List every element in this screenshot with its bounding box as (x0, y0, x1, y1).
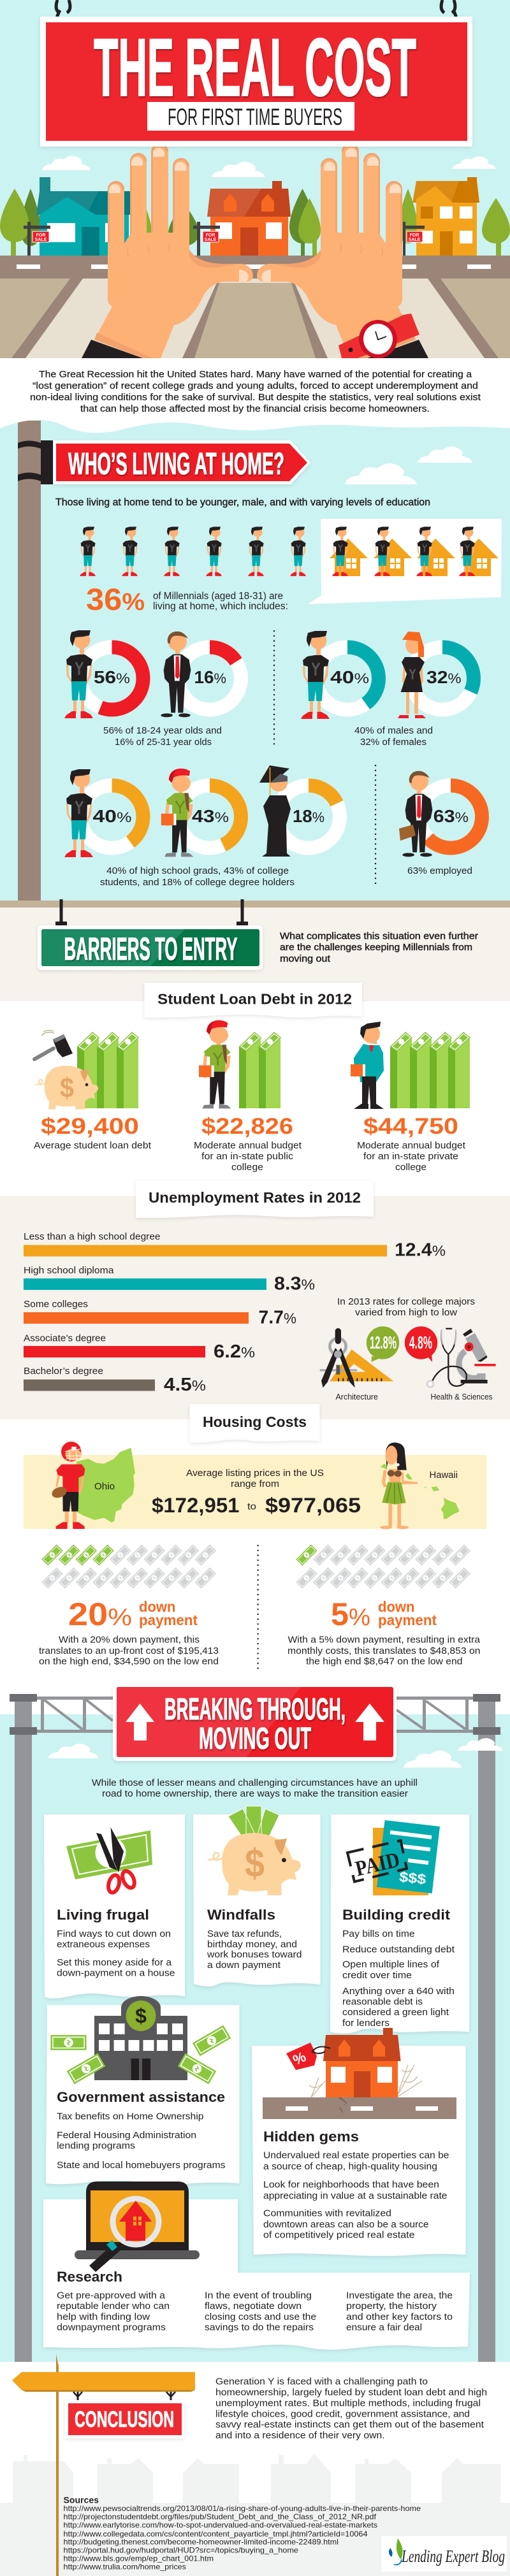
bar: less than high school (24, 1232, 446, 1261)
sources: Sources (64, 2494, 99, 2505)
sources: http://www.pewsocialtrends.org/2013/08/01/a-rising-share-of-young-adults-live-in-their-parents-home (64, 2504, 421, 2513)
captions: age: 56% of 18-24 year olds and (103, 726, 222, 736)
conclusion signpost (12, 2354, 195, 2576)
major labels: Health & Sciences (431, 1393, 492, 1401)
divider (375, 765, 376, 885)
watch (339, 314, 419, 358)
major labels (335, 1393, 492, 1401)
icon: health and sciences (427, 1328, 496, 1387)
panel: hidden gems: Hidden gems (263, 2129, 359, 2145)
piggy bank (35, 1066, 98, 1110)
conclusion text: unemployment rates. But multiple methods, including frugal (215, 2399, 481, 2409)
research column 3: ensure a fair deal (346, 2322, 422, 2333)
for sale signs: SALE (35, 238, 47, 242)
sources: http://www.earlytorise.com/how-to-spot-undervalued-and-overvalued-real-estate-markets (64, 2521, 377, 2529)
panel: building credit (330, 1814, 469, 2034)
for sale signs: SALE (205, 238, 217, 242)
panel: building credit: Open multiple lines of (342, 1960, 440, 1970)
stat: public college: for an in-state public (201, 1152, 293, 1162)
clouds (345, 447, 472, 484)
bar: some colleges (24, 1299, 296, 1328)
intro text: that can help those affected most by the financial crisis become homeowners. (80, 404, 430, 414)
house: yellow (412, 177, 479, 256)
captions: gender: 40% of males and (354, 726, 433, 736)
panel: living frugal: Set this money aside for a (57, 1958, 172, 1968)
donut: 40% males (301, 631, 379, 719)
panel: building credit: reasonable debt is (342, 1997, 423, 2008)
research column 3: property, the history (346, 2301, 437, 2312)
conclusion text: homeownership, largely fueled by student loan debt and high (215, 2387, 487, 2398)
stat: private college: for an in-state private (363, 1152, 458, 1162)
bar: some colleges: 7.7% (259, 1308, 296, 1328)
research column 3 (346, 2290, 453, 2333)
sources: https://portal.hud.gov/hudportal/HUD?src=/topics/buying_a_home (64, 2545, 298, 2554)
panel: windfalls: birthday money, and (207, 1940, 297, 1950)
bar: high school: 8.3% (274, 1273, 315, 1294)
panel: living frugal: Find ways to cut down on (57, 1929, 171, 1939)
card heading: housing costs (190, 1404, 320, 1443)
divider (273, 630, 275, 745)
clouds: top scene (42, 156, 496, 177)
research column 2: flaws, negotiate down (205, 2301, 302, 2312)
hands framing (82, 143, 428, 358)
panel: hidden gems: a source of cheap, high-quality housing (263, 2162, 437, 2172)
sources: http://www.collegedata.com/cs/content/content_payarticle_tmpl.jhtml?articleId=10064 (64, 2529, 368, 2538)
panel: hidden gems: Undervalued real estate properties can be (263, 2150, 449, 2160)
title sign (40, 0, 472, 147)
research column 3: and other key factors to (346, 2312, 453, 2322)
heading sign: barriers to entry (38, 899, 263, 970)
gantry structure (10, 1694, 500, 2362)
heading sign: who's living at home (18, 440, 310, 484)
donut: 40% high school (64, 769, 143, 857)
stat: 36% (86, 583, 288, 617)
bill grid: 20% (41, 1544, 216, 1589)
stat: public college (194, 1020, 302, 1173)
bar: less than high school: 12.4% (395, 1240, 446, 1261)
barriers text: are the challenges keeping Millennials from (280, 943, 472, 953)
donut: 16%: 16% (194, 667, 226, 687)
subtitle (147, 102, 354, 131)
price text: Average listing prices in the US (186, 1468, 324, 1479)
stat: average debt: $29,400 (41, 1114, 139, 1139)
heading sign: conclusion (65, 2400, 184, 2438)
majors text (337, 1297, 475, 1318)
panel: living frugal: extraneous expenses (57, 1940, 150, 1950)
for sale signs (24, 222, 425, 256)
heading sign: barriers to entry: BARRIERS TO ENTRY (64, 931, 237, 967)
bubble: 4.8% (405, 1326, 437, 1362)
sources: http://projectonstudentdebt.org/files/pub/Student_Debt_and_the_Class_of_2012_NR.pdf (64, 2512, 377, 2521)
card heading: student loan debt: Student Loan Debt in 2012 (157, 990, 352, 1007)
card heading: unemployment (136, 1181, 374, 1218)
ohio map and football player (50, 1442, 135, 1529)
panel: living frugal: down-payment on a house (57, 1968, 175, 1978)
caption: employed: 63% employed (407, 866, 472, 876)
icon: architecture (320, 1328, 393, 1387)
bar: bachelor (24, 1366, 206, 1395)
divider (258, 1545, 259, 1670)
for sale signs: FOR (206, 233, 215, 238)
donut: 18% graduates (259, 765, 340, 857)
majors text: In 2013 rates for college majors (337, 1297, 475, 1307)
hammer (34, 1031, 73, 1059)
conclusion text: Generation Y is faced with a challenging path to (215, 2377, 428, 2387)
intro paper (0, 358, 510, 433)
barriers text (280, 932, 478, 964)
donut: 16% (161, 632, 241, 717)
panel: windfalls: a down payment (207, 1960, 280, 1971)
donut: 56% (64, 630, 143, 718)
bill grid: 5% (296, 1544, 470, 1589)
bar chart (24, 1232, 446, 1395)
money stack (77, 1032, 139, 1108)
stat: 20% down payment (39, 1596, 219, 1667)
price text: $172,951 (152, 1494, 240, 1517)
panel: living frugal: Living frugal (57, 1907, 149, 1923)
panel: research: Research (57, 2269, 122, 2285)
stat: 5% down payment: down (378, 1598, 414, 1615)
panel: hidden gems: Look for neighborhoods that have been (263, 2180, 439, 2190)
stat: 5% down payment: payment (378, 1612, 437, 1628)
stat: 20% down payment: on the high end, $34,590 on the low end (39, 1657, 219, 1667)
figure: teal jacket (351, 1022, 384, 1109)
bar: high school (24, 1266, 315, 1294)
stat: 36%: 36% (86, 583, 145, 617)
heading sign: conclusion: CONCLUSION (75, 2407, 174, 2432)
donut: 63% employed (399, 771, 482, 857)
icon: cut bill (66, 1827, 152, 1894)
intro text: “lost generation” of recent college grads and young adults, forced to accept underemployment and (33, 381, 478, 391)
icon: run-down house (263, 2028, 456, 2119)
panel: building credit: Building credit (342, 1907, 451, 1923)
conclusion text: savvy real-estate instincts can get them out of the basement (215, 2420, 484, 2430)
bubble: 12.8% (367, 1326, 399, 1362)
captions: gender (354, 726, 433, 748)
bar: associate: Associate’s degree (24, 1333, 106, 1343)
donut: 32% females (398, 632, 474, 718)
research column 2: In the event of troubling (205, 2290, 312, 2301)
stat: 5% down payment (288, 1596, 481, 1667)
research column 1: Get pre-approved with a (57, 2290, 166, 2301)
stat: 20% down payment: down (139, 1598, 176, 1615)
panel: government assistance: Federal Housing Administration (57, 2131, 196, 2141)
panel: building credit: credit over time (342, 1971, 412, 1981)
icon: paid bill: PAID (353, 1848, 402, 1881)
panel: hidden gems (252, 2028, 466, 2256)
panel: hidden gems: appreciating in value at a sustainable rate (263, 2191, 448, 2201)
speech bubble (308, 519, 502, 604)
intro text: road to home ownership, there are ways to make the transition easier (102, 1789, 408, 1799)
card heading: unemployment: Unemployment Rates in 2012 (149, 1189, 361, 1206)
stat: public college: college (231, 1162, 263, 1173)
captions: education: students, and 18% of college degree holders (100, 878, 295, 888)
stat: public college: Moderate annual budget (194, 1141, 302, 1151)
sign panel (40, 17, 472, 147)
donut: 63% employed: 63% (433, 806, 469, 826)
price tag: % (290, 2048, 309, 2068)
stat: private college: Moderate annual budget (357, 1141, 465, 1151)
bar: less than high school: Less than a high school degree (24, 1232, 161, 1242)
people row: ten millennials (80, 527, 475, 576)
stat: 20% down payment: 20% (68, 1596, 132, 1632)
research column 2 (205, 2290, 316, 2333)
stat: 5% down payment: monthly costs, this translates to $48,853 on (288, 1646, 481, 1656)
research column 2: closing costs and use the (205, 2312, 316, 2322)
trees (0, 189, 510, 256)
panel: windfalls: work bonuses toward (207, 1950, 302, 1960)
price band: Hawaii (430, 1470, 458, 1480)
captions: education: 40% of high school grads, 43% of college (106, 866, 289, 876)
stat: 36%: of Millennials (aged 18-31) are (153, 591, 283, 602)
stat: 20% down payment: payment (139, 1612, 198, 1628)
heading sign: breaking through (113, 1684, 397, 1761)
conclusion text: lifestyle choices, good credit, government assistance, and (215, 2409, 470, 2419)
donut: 32% females: 32% (426, 667, 462, 687)
panel: building credit: for lenders (342, 2018, 390, 2029)
intro text (30, 370, 481, 414)
heading sign: who's living at home: WHO’S LIVING AT HOME? (68, 447, 284, 481)
hawaii and hula dancer (380, 1442, 460, 1529)
panel: government assistance: lending programs (57, 2141, 135, 2152)
skyline (0, 2454, 510, 2576)
small houses (330, 539, 499, 576)
panel: building credit: Anything over a 640 with (342, 1986, 455, 1997)
panel: windfalls: Save tax refunds, (207, 1929, 282, 1939)
heading sign: breaking through: MOVING OUT (199, 1722, 311, 1756)
house: orange (207, 181, 291, 256)
barriers text: What complicates this situation even further (280, 932, 478, 942)
for sale signs: FOR (36, 233, 45, 238)
stat: 5% down payment: 5% (331, 1596, 370, 1632)
road and lawn (0, 256, 510, 358)
research column 2: savings to do the repairs (205, 2322, 314, 2333)
price text: to (247, 1501, 256, 1512)
panel: hidden gems: downtown areas can also be a source (263, 2220, 428, 2230)
stat: 20% down payment: With a 20% down payment, this (59, 1635, 200, 1646)
intro text: While those of lesser means and challenging circumstances have an uphill (92, 1778, 418, 1788)
heading sign: breaking through: BREAKING THROUGH, (164, 1693, 346, 1726)
panel: research (43, 2182, 470, 2350)
bubble: 12.8%: 12.8% (370, 1333, 397, 1352)
research column 1: help with finding low (57, 2312, 150, 2322)
sources: http://budgeting.thenest.com/become-homeowner-limited-income-22489.html (64, 2538, 339, 2547)
graduate figure (259, 765, 291, 857)
pole: who's living (18, 421, 41, 901)
bar: high school: High school diploma (24, 1266, 115, 1276)
panel: building credit: Reduce outstanding debt (342, 1945, 455, 1955)
stat: public college: $22,826 (201, 1114, 293, 1139)
captions: age: 16% of 25-31 year olds (115, 737, 212, 748)
price text: range from (231, 1479, 279, 1489)
stat: average debt: Average student loan debt (34, 1141, 151, 1151)
panel: building credit: considered a green light (342, 2008, 449, 2018)
captions: education (100, 866, 295, 888)
stat: 36%: living at home, which includes: (153, 601, 288, 612)
arrow right (355, 1704, 384, 1740)
bar: bachelor: 4.5% (164, 1375, 206, 1395)
house: teal (36, 177, 130, 256)
sources: http://www.trulia.com/home_prices (64, 2562, 186, 2571)
bubble: 4.8%: 4.8% (409, 1333, 432, 1352)
donut: 40% high school: 40 % (93, 806, 131, 826)
price tag (286, 2043, 330, 2070)
price text: $977,065 (265, 1494, 361, 1517)
icon: bank with bills (50, 1996, 231, 2084)
intro text: The Great Recession hit the United States hard. Many have warned of the potential for creating a (39, 370, 472, 380)
subheading: Those living at home tend to be younger, male, and with varying levels of education (55, 497, 430, 508)
panel: windfalls (193, 1806, 320, 1986)
stat: 5% down payment: With a 5% down payment, resulting in extra (288, 1635, 481, 1646)
arrow left (126, 1704, 154, 1740)
card heading: student loan debt (144, 983, 362, 1018)
piggy bank: $ (60, 1073, 74, 1104)
stat: 5% down payment: the high end $8,647 on the low end (306, 1657, 463, 1667)
stat: private college: college (395, 1162, 426, 1173)
major labels: Architecture (335, 1393, 378, 1401)
panel: windfalls: Windfalls (207, 1907, 275, 1923)
icon: piggy bank with bills: $ (245, 1842, 265, 1886)
icon: paid bill: $$$ (398, 1869, 427, 1887)
price band: Ohio (94, 1481, 115, 1492)
captions: gender: 32% of females (360, 737, 426, 748)
intro text: non-ideal living conditions for the sake of survival. But despite the statistics, very real solutions exist (30, 393, 481, 403)
icon: laptop and magnifier (75, 2182, 200, 2272)
conclusion text: and into a residence of their very own. (215, 2431, 385, 2441)
panel: hidden gems: Communities with revitalized (263, 2209, 391, 2219)
woman figure (398, 632, 426, 718)
panel: government assistance: Tax benefits on Home Ownership (57, 2112, 204, 2122)
direction arrow (12, 2372, 195, 2392)
research column 3: Investigate the area, the (346, 2290, 453, 2301)
for sale signs: SALE (409, 238, 421, 242)
panel: government assistance (46, 1996, 240, 2184)
sign chains (56, 0, 456, 30)
research column 1: downpayment programs (57, 2322, 166, 2333)
intro text (92, 1778, 418, 1799)
donut: 56%: 56% (94, 667, 130, 687)
donut: 43% college (161, 769, 241, 857)
panel: government assistance: Government assistance (57, 2089, 225, 2105)
panel: living frugal (44, 1814, 185, 1999)
stat: private college: $44,750 (363, 1114, 458, 1139)
icon: piggy bank with bills (208, 1806, 301, 1895)
stat: 20% down payment: translates to an up-front cost of $195,413 (39, 1646, 219, 1656)
donut: 43% college: 43% (192, 806, 229, 826)
for sale signs: FOR (410, 233, 419, 238)
donut: 40% males: 40 % (330, 667, 369, 687)
majors text: varied from high to low (355, 1308, 458, 1318)
conclusion text (215, 2377, 487, 2441)
subtitle: FOR FIRST TIME BUYERS (168, 104, 342, 130)
bar: some colleges: Some colleges (24, 1299, 88, 1310)
sources (64, 2494, 421, 2571)
bar: associate (24, 1333, 255, 1362)
bar: associate: 6.2% (214, 1342, 255, 1362)
price text (152, 1468, 361, 1517)
sources: http://www.bls.gov/emp/ep_chart_001.htm (64, 2554, 214, 2563)
donut: 18% graduates: 18% (293, 806, 324, 826)
icon: bank with bills: $ (135, 2004, 147, 2027)
stat: average debt (34, 1031, 151, 1151)
bar: bachelor: Bachelor’s degree (24, 1366, 103, 1377)
research column 1 (57, 2290, 170, 2333)
logo: lending expert blog (381, 2536, 507, 2572)
panel: building credit: Pay bills on time (342, 1929, 414, 1939)
captions: age (103, 726, 222, 748)
panel: government assistance: State and local homebuyers programs (57, 2160, 226, 2171)
panel: hidden gems: of competitively priced real estate (263, 2231, 414, 2241)
card heading: housing costs: Housing Costs (203, 1414, 307, 1430)
barriers text: moving out (280, 954, 330, 964)
clouds (48, 1738, 503, 1768)
icon: paid bill (347, 1820, 440, 1895)
research column 1: reputable lender who can (57, 2301, 170, 2312)
stat: private college (351, 1022, 470, 1173)
price band (24, 1442, 486, 1529)
